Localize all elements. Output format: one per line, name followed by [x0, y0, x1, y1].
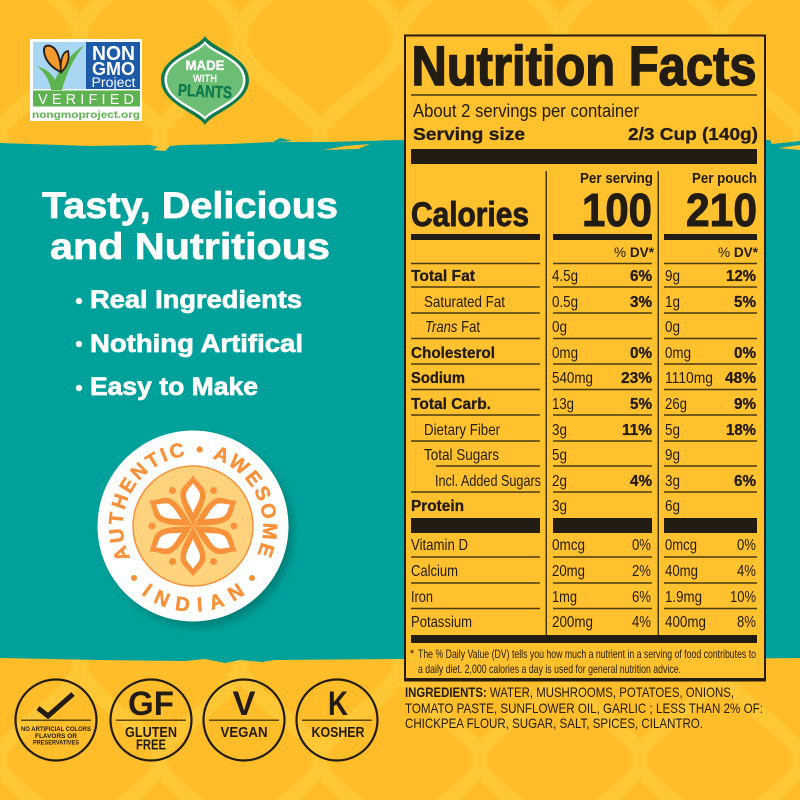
row: vitamin d: 0mcg: [552, 537, 585, 554]
panel: nutrition facts: [405, 34, 765, 680]
row: total fat: 6%: [630, 268, 652, 285]
row: iron: 10%: [730, 589, 756, 606]
servings: Serving size: [413, 124, 525, 144]
row: cholesterol: Cholesterol: [411, 345, 495, 362]
heading: Tasty, Delicious: [42, 185, 338, 226]
icon: no artificial colors: [16, 680, 96, 760]
row: potassium: 4%: [632, 614, 651, 631]
row: added sugars: 4%: [630, 473, 652, 490]
row: added sugars: [435, 473, 756, 490]
logo: Non-GMO Project Verified: NON: [92, 43, 135, 65]
row: cholesterol: 0%: [734, 345, 756, 362]
row: trans fat: Trans Fat: [425, 319, 480, 336]
row: trans fat: 0g: [665, 319, 680, 336]
row: saturated fat: 1g: [665, 294, 680, 311]
row: dietary fiber: Dietary Fiber: [424, 422, 501, 439]
calories: Calories: [411, 196, 529, 234]
icon: no artificial colors: PRESERVATIVES: [33, 740, 80, 746]
row: added sugars: Incl. Added Sugars: [435, 473, 541, 490]
logo: Made with Plants: PLANTS: [178, 81, 232, 102]
servings: About 2 servings per container: [413, 101, 639, 121]
row: calcium: [411, 563, 756, 580]
row: sodium: Sodium: [411, 370, 465, 387]
icon: gluten free: GLUTEN: [125, 725, 177, 741]
servings: 2/3 Cup (140g): [628, 124, 758, 144]
row: dietary fiber: 5g: [665, 422, 680, 439]
ingredients: CHICKPEA FLOUR, SUGAR, SALT, SPICES, CILANTRO.: [405, 715, 703, 731]
bullet list: Easy to Make: [90, 373, 258, 401]
row: total sugars: 9g: [665, 447, 680, 464]
icon: vegan: [204, 680, 284, 760]
logo: Non-GMO Project Verified: GMO: [92, 58, 135, 79]
icon: flower: [143, 475, 243, 577]
calories: % DV*: [718, 244, 759, 260]
row: total fat: 12%: [726, 268, 756, 285]
icon: kosher: [296, 680, 378, 760]
black divider bars: [411, 518, 757, 533]
row rules: [411, 264, 757, 608]
row: sodium: 23%: [621, 370, 652, 387]
footnote: [410, 647, 756, 676]
row: vitamin d: Vitamin D: [411, 537, 468, 554]
row: total sugars: 5g: [552, 447, 567, 464]
icon: butterfly: [44, 46, 69, 72]
row: saturated fat: 5%: [734, 294, 756, 311]
row: protein: Protein: [411, 498, 464, 515]
calories: % DV*: [614, 244, 655, 260]
row: protein: 3g: [552, 498, 567, 515]
calories: Per pouch: [692, 171, 757, 187]
row: potassium: [411, 614, 756, 631]
icon: vegan: V: [232, 685, 256, 723]
row: sodium: [411, 370, 756, 387]
row: dietary fiber: 18%: [726, 422, 756, 439]
title: Nutrition Facts: [412, 34, 756, 97]
row: sodium: 1110mg: [665, 370, 713, 387]
row: potassium: 200mg: [552, 614, 593, 631]
heading: and Nutritious: [50, 226, 330, 267]
row: added sugars: 6%: [734, 473, 756, 490]
logo: Non-GMO Project Verified: nongmoproject.org: [32, 109, 140, 121]
row: vitamin d: 0%: [737, 537, 756, 554]
row: protein: [411, 498, 680, 515]
row: cholesterol: 0mg: [552, 345, 578, 362]
icon: no artificial colors: NO ARTIFICIAL COLORS: [21, 726, 92, 733]
row: cholesterol: [411, 345, 756, 362]
row: calcium: 40mg: [665, 563, 698, 580]
row: total carb: 13g: [552, 396, 574, 413]
row: total fat: Total Fat: [411, 268, 476, 285]
row: cholesterol: 0mg: [665, 345, 691, 362]
row: total carb: 9%: [734, 396, 756, 413]
badge: Authentic Awesome Indian: AUTHENTIC • AWESOME: [108, 443, 278, 558]
row: total sugars: [424, 447, 680, 464]
logo: Non-GMO Project Verified: Project: [92, 75, 136, 90]
row: total carb: [411, 396, 756, 413]
icon: vegan: VEGAN: [220, 725, 268, 741]
icon: gluten free: FREE: [136, 738, 166, 754]
row: total carb: 5%: [630, 396, 652, 413]
row: iron: [411, 589, 756, 606]
footnote: a daily diet. 2,000 calories a day is used for general nutrition advice.: [418, 662, 681, 676]
row: vitamin d: 0%: [632, 537, 651, 554]
row: total carb: 26g: [665, 396, 687, 413]
footnote: *: [410, 648, 415, 660]
bullet list: Real Ingredients: [90, 286, 302, 314]
row: total fat: 4.5g: [552, 268, 578, 285]
row: dietary fiber: [424, 422, 756, 439]
row: potassium: 400mg: [665, 614, 706, 631]
row: total sugars: Total Sugars: [424, 447, 499, 464]
row: protein: 6g: [665, 498, 680, 515]
logo: Made with Plants: WITH: [193, 73, 217, 85]
row: iron: 6%: [632, 589, 651, 606]
row: total carb: Total Carb.: [411, 396, 491, 413]
row: iron: Iron: [411, 589, 433, 606]
row: vitamin d: [411, 537, 756, 554]
calories: [411, 171, 759, 260]
bullet list: [76, 286, 303, 401]
row: trans fat: [425, 319, 680, 336]
row: calcium: Calcium: [411, 563, 458, 580]
ingredients: [405, 684, 763, 731]
icon: green check: [37, 45, 84, 90]
row: added sugars: 2g: [552, 473, 567, 490]
row: trans fat: 0g: [552, 319, 567, 336]
row: total fat: [411, 268, 756, 285]
icon: gluten free: GF: [128, 685, 174, 723]
row: saturated fat: Saturated Fat: [424, 294, 505, 311]
row: calcium: 4%: [737, 563, 756, 580]
icon: kosher: K: [328, 685, 348, 723]
row: potassium: Potassium: [411, 614, 472, 631]
icon: gluten free: [110, 680, 192, 760]
teal band: [0, 138, 800, 663]
servings: [413, 101, 758, 144]
row: cholesterol: 0%: [630, 345, 652, 362]
row: saturated fat: [424, 294, 756, 311]
row: dietary fiber: 11%: [622, 422, 652, 439]
logo: Non-GMO Project Verified: [30, 39, 142, 121]
ingredients: INGREDIENTS: WATER, MUSHROOMS, POTATOES, ONIONS,: [405, 684, 734, 700]
row: total fat: 9g: [665, 268, 680, 285]
row: iron: 1mg: [552, 589, 577, 606]
calories: 100: [582, 184, 652, 236]
row: calcium: 20mg: [552, 563, 585, 580]
calories: 210: [686, 184, 757, 236]
badge: Authentic Awesome Indian: [98, 430, 296, 630]
calories: Per serving: [580, 171, 653, 187]
logo: Made with Plants: [161, 36, 249, 125]
heading: [42, 185, 338, 267]
logo: Non-GMO Project Verified: VERIFIED: [38, 92, 134, 108]
badge: Authentic Awesome Indian: INDIAN: [142, 582, 245, 612]
row: vitamin d: 0mcg: [665, 537, 697, 554]
row: iron: 1.9mg: [665, 589, 702, 606]
icon: no artificial colors: FLAVORS OR: [35, 733, 77, 740]
icon: kosher: KOSHER: [312, 725, 365, 741]
bullet list: Nothing Artifical: [90, 330, 303, 358]
row: potassium: 8%: [737, 614, 756, 631]
logo: Made with Plants: MADE: [186, 57, 224, 73]
row: added sugars: 3g: [665, 473, 680, 490]
row: dietary fiber: 3g: [552, 422, 567, 439]
row: saturated fat: 3%: [630, 294, 652, 311]
row: saturated fat: 0.5g: [552, 294, 578, 311]
row: sodium: 540mg: [552, 370, 593, 387]
row: calcium: 2%: [632, 563, 651, 580]
row: sodium: 48%: [725, 370, 756, 387]
